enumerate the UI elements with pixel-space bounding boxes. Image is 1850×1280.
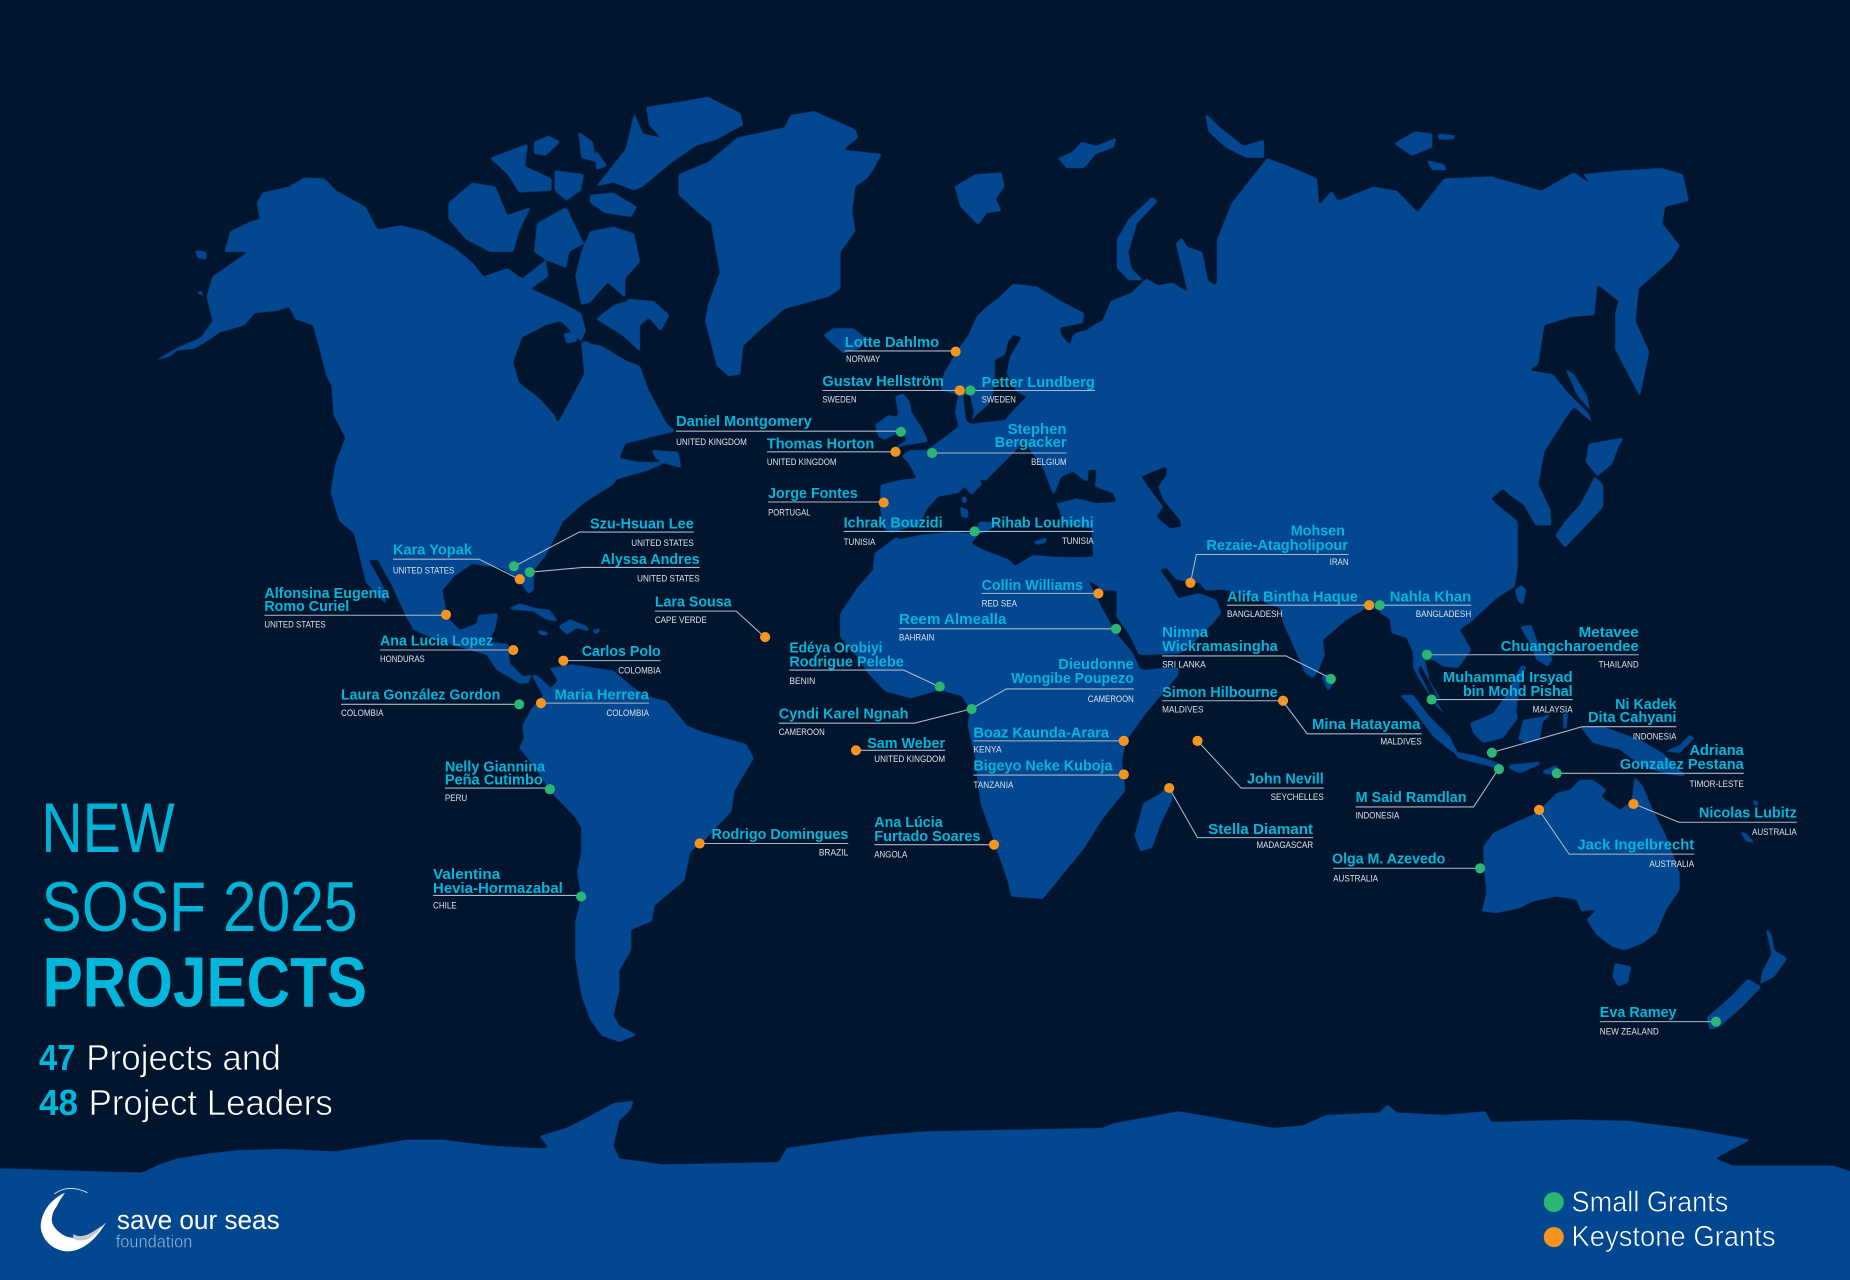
callout: Laura González Gordon: COLOMBIA <box>341 708 384 718</box>
callout: Jack Ingelbrecht: Jack Ingelbrecht <box>1577 837 1694 853</box>
legend: Small Grants <box>1571 1186 1728 1218</box>
callout: Jorge Fontes: PORTUGAL <box>768 508 811 518</box>
project and leader counts: 47 <box>39 1037 76 1078</box>
callout: Ichrak Bouzidi: Ichrak Bouzidi <box>844 515 943 531</box>
map: main land masses <box>152 158 1689 1042</box>
title: SOSF 2025 <box>41 867 358 946</box>
callout: Sam Weber <box>851 736 945 764</box>
callout: Laura González Gordon <box>341 688 524 718</box>
callout: Szu-Hsuan Lee: UNITED STATES <box>631 538 694 548</box>
callout: Valentina Hevia-Hormazabal: CHILE <box>433 900 457 910</box>
callout: Edéya Orobiyi Rodrigue Pelebe: BENIN <box>789 676 815 686</box>
callout: Nicolas Lubitz <box>1628 799 1797 837</box>
callout: Nimna Wickramasingha: Nimna <box>1162 625 1209 641</box>
callout: Bigeyo Neke Kuboja: Bigeyo Neke Kuboja <box>973 758 1113 774</box>
callout: Dieudonne Wongibe Poupezo <box>967 657 1134 714</box>
project and leader counts: 48 <box>39 1082 78 1123</box>
callout: Adriana Gonzalez Pestana: Adriana <box>1689 743 1745 759</box>
callout: Thomas Horton: Thomas Horton <box>767 436 874 452</box>
callout: Edéya Orobiyi Rodrigue Pelebe: Edéya Orobiyi <box>789 640 883 656</box>
callout: Thomas Horton <box>767 436 901 467</box>
callout: Petter Lundberg: Petter Lundberg <box>982 375 1095 391</box>
callout: Jorge Fontes <box>768 486 889 518</box>
logo: save our seas foundation <box>41 1188 280 1252</box>
callout: Ni Kadek Dita Cahyani <box>1487 697 1677 758</box>
callout: Thomas Horton: UNITED KINGDOM <box>767 457 837 467</box>
callout: Alfonsina Eugenia Romo Curiel: Romo Curiel <box>264 599 349 615</box>
callout: Alifa Bintha Haque <box>1227 590 1374 619</box>
callout: Ni Kadek Dita Cahyani: Dita Cahyani <box>1588 710 1676 726</box>
callout: Lotte Dahlmo <box>845 335 961 364</box>
callout: John Nevill: John Nevill <box>1247 771 1324 787</box>
callout: Cyndi Karel Ngnah: Cyndi Karel Ngnah <box>779 706 909 722</box>
callout: Rihab Louhichi: Rihab Louhichi <box>991 515 1094 531</box>
callout: Nelly Giannina Peña Cutimbo: Nelly Giannina <box>445 760 546 776</box>
callout: M Said Ramdlan: M Said Ramdlan <box>1356 790 1467 806</box>
callout: Adriana Gonzalez Pestana: Gonzalez Pestana <box>1620 757 1745 773</box>
callout: Ana Lúcia Furtado Soares <box>874 815 999 860</box>
callout: M Said Ramdlan: INDONESIA <box>1356 811 1399 821</box>
callout: Simon Hilbourne <box>1162 685 1288 715</box>
callout: Carlos Polo <box>558 644 661 676</box>
callout: Nimna Wickramasingha <box>1162 625 1336 684</box>
callout: Szu-Hsuan Lee: Szu-Hsuan Lee <box>590 517 694 533</box>
callout: Eva Ramey: Eva Ramey <box>1600 1005 1677 1021</box>
callout: Alfonsina Eugenia Romo Curiel <box>264 586 451 630</box>
callout: Stella Diamant: MADAGASCAR <box>1257 840 1314 850</box>
callout: Stephen Bergacker <box>927 422 1067 467</box>
callout: Kara Yopak: UNITED STATES <box>393 565 454 575</box>
callout: Ana Lúcia Furtado Soares: Furtado Soares <box>874 829 980 845</box>
callout: Olga M. Azevedo: Olga M. Azevedo <box>1332 852 1445 868</box>
callout: Metavee Chuangcharoendee: Chuangcharoendee <box>1501 639 1639 655</box>
callout: Ni Kadek Dita Cahyani: Ni Kadek <box>1615 697 1677 713</box>
callout: Nahla Khan: BANGLADESH <box>1416 609 1471 619</box>
callout: Valentina Hevia-Hormazabal <box>433 867 586 910</box>
callout: John Nevill: SEYCHELLES <box>1271 792 1324 802</box>
callout: Ana Lúcia Furtado Soares: ANGOLA <box>874 850 907 860</box>
callout: Simon Hilbourne: MALDIVES <box>1162 705 1203 715</box>
callout: Lara Sousa <box>655 594 770 642</box>
callout: Stephen Bergacker: BELGIUM <box>1031 457 1067 467</box>
callout: Reem Almealla: BAHRAIN <box>899 633 934 643</box>
callout: Adriana Gonzalez Pestana: TIMOR-LESTE <box>1689 779 1744 789</box>
callout: Lotte Dahlmo: NORWAY <box>846 354 880 364</box>
callout: Nahla Khan: Nahla Khan <box>1390 590 1471 606</box>
callout: Ichrak Bouzidi: TUNISIA <box>844 537 875 547</box>
callout: Alifa Bintha Haque: BANGLADESH <box>1227 609 1282 619</box>
callout: Lara Sousa: CAPE VERDE <box>655 615 707 625</box>
callout: Daniel Montgomery: Daniel Montgomery <box>676 414 813 430</box>
callout: Jorge Fontes: Jorge Fontes <box>768 486 858 502</box>
callout: Boaz Kaunda-Arara: Boaz Kaunda-Arara <box>973 725 1110 741</box>
callout: Maria Herrera: COLOMBIA <box>606 708 649 718</box>
callout: Nelly Giannina Peña Cutimbo: Peña Cutimbo <box>445 773 543 789</box>
callout: Collin Williams: Collin Williams <box>982 578 1083 594</box>
callout: Metavee Chuangcharoendee <box>1422 625 1639 670</box>
callout: Adriana Gonzalez Pestana <box>1552 743 1745 789</box>
callout: Muhammad Irsyad bin Mohd Pishal: bin Mohd Pishal <box>1463 684 1573 700</box>
callout: Alyssa Andres: UNITED STATES <box>637 574 700 584</box>
callout: Collin Williams: RED SEA <box>982 598 1017 608</box>
callout: Nahla Khan <box>1375 590 1471 619</box>
callout: Ni Kadek Dita Cahyani: INDONESIA <box>1633 732 1676 742</box>
callout: John Nevill <box>1192 736 1324 802</box>
callout: Boaz Kaunda-Arara: KENYA <box>973 745 1002 755</box>
callout: Petter Lundberg <box>965 375 1095 404</box>
callout: Maria Herrera: Maria Herrera <box>555 688 650 704</box>
logo: save our seas foundation: foundation <box>116 1232 192 1252</box>
callout: Muhammad Irsyad bin Mohd Pishal: MALAYSIA <box>1533 705 1573 715</box>
callout: Daniel Montgomery <box>676 414 906 447</box>
callout: Rodrigo Domingues: BRAZIL <box>819 847 848 857</box>
callout: Kara Yopak <box>393 542 525 584</box>
callout: Ana Lucia Lopez: HONDURAS <box>380 654 425 664</box>
logo: save our seas foundation: save our seas <box>117 1204 280 1235</box>
callout: Nelly Giannina Peña Cutimbo <box>445 760 555 803</box>
callout: Maria Herrera <box>536 688 650 718</box>
callout: Mina Hatayama: Mina Hatayama <box>1312 717 1421 733</box>
callout: Sam Weber: Sam Weber <box>867 736 945 752</box>
callout: Stephen Bergacker: Stephen <box>1008 422 1067 438</box>
callout: Metavee Chuangcharoendee: THAILAND <box>1599 660 1639 670</box>
callout: Alfonsina Eugenia Romo Curiel: UNITED STATES <box>264 620 326 630</box>
callout: Kara Yopak: Kara Yopak <box>393 542 473 558</box>
map: Antarctica band <box>0 1101 1850 1280</box>
callout: Dieudonne Wongibe Poupezo: Dieudonne <box>1058 657 1134 673</box>
callout: Olga M. Azevedo <box>1332 852 1485 883</box>
callout: Jack Ingelbrecht <box>1534 805 1694 869</box>
callout: Cyndi Karel Ngnah <box>779 706 971 737</box>
callout: Reem Almealla: Reem Almealla <box>899 612 1007 628</box>
map: inland seas and bays <box>513 282 1227 670</box>
callout: Sam Weber: UNITED KINGDOM <box>874 754 945 764</box>
title: NEW <box>41 788 175 867</box>
callout: Mohsen Rezaie-Atagholipour: Rezaie-Atagholipour <box>1206 538 1348 554</box>
title: PROJECTS <box>43 942 367 1021</box>
callout: Edéya Orobiyi Rodrigue Pelebe <box>789 640 945 692</box>
legend <box>1544 1186 1776 1252</box>
callout: Cyndi Karel Ngnah: CAMEROON <box>779 727 825 737</box>
callout: Muhammad Irsyad bin Mohd Pishal <box>1427 670 1573 715</box>
callout: Rihab Louhichi: TUNISIA <box>1062 536 1094 546</box>
callout: Mohsen Rezaie-Atagholipour <box>1185 524 1349 588</box>
callout: Alyssa Andres <box>525 552 700 584</box>
callout: Eva Ramey <box>1600 1005 1721 1037</box>
callout: Nimna Wickramasingha: SRI LANKA <box>1162 660 1206 670</box>
callout: Alyssa Andres: Alyssa Andres <box>601 552 700 568</box>
callout: Olga M. Azevedo: AUSTRALIA <box>1333 873 1378 883</box>
callout: Gustav Hellström: Gustav Hellström <box>822 374 944 390</box>
callout: Edéya Orobiyi Rodrigue Pelebe: Rodrigue Pelebe <box>789 655 904 671</box>
callout: Ichrak Bouzidi <box>844 515 975 547</box>
callout: Eva Ramey: NEW ZEALAND <box>1600 1027 1659 1037</box>
callout: Stephen Bergacker: Bergacker <box>995 435 1067 451</box>
callout: Bigeyo Neke Kuboja <box>973 758 1129 790</box>
callout: Nicolas Lubitz: AUSTRALIA <box>1752 827 1797 837</box>
callout: Ana Lúcia Furtado Soares: Ana Lúcia <box>874 815 944 831</box>
callout: Collin Williams <box>982 578 1103 608</box>
callout: Mina Hatayama: MALDIVES <box>1380 736 1422 746</box>
callout: Mohsen Rezaie-Atagholipour: Mohsen <box>1291 524 1345 540</box>
callout: Metavee Chuangcharoendee: Metavee <box>1579 625 1639 641</box>
callout: Lotte Dahlmo: Lotte Dahlmo <box>845 335 939 351</box>
callout: Daniel Montgomery: UNITED KINGDOM <box>676 437 747 447</box>
callout: Valentina Hevia-Hormazabal: Hevia-Hormazabal <box>433 881 563 897</box>
callout: Nicolas Lubitz: Nicolas Lubitz <box>1699 806 1797 822</box>
callout: Simon Hilbourne: Simon Hilbourne <box>1162 685 1278 701</box>
callout: Reem Almealla <box>899 612 1121 643</box>
callout: Gustav Hellström <box>822 374 965 404</box>
callout: Ana Lucia Lopez <box>380 633 518 664</box>
callout: Stella Diamant: Stella Diamant <box>1208 822 1313 838</box>
callout: Ana Lucia Lopez: Ana Lucia Lopez <box>380 633 493 649</box>
callout: Valentina Hevia-Hormazabal: Valentina <box>433 867 501 883</box>
project and leader counts: Projects and <box>86 1037 281 1078</box>
callout: Boaz Kaunda-Arara <box>973 725 1129 755</box>
callout: Bigeyo Neke Kuboja: TANZANIA <box>973 780 1014 790</box>
callout: Rihab Louhichi <box>969 515 1094 546</box>
callout: Mina Hatayama <box>1282 701 1422 746</box>
callout: Nimna Wickramasingha: Wickramasingha <box>1162 639 1279 655</box>
callout: M Said Ramdlan <box>1356 764 1504 821</box>
legend: Keystone Grants <box>1571 1220 1776 1252</box>
project and leader counts: Project Leaders <box>89 1082 333 1123</box>
callout: Szu-Hsuan Lee <box>509 517 694 571</box>
callout: Petter Lundberg: SWEDEN <box>982 394 1016 404</box>
callout: Dieudonne Wongibe Poupezo: CAMEROON <box>1088 694 1134 704</box>
callout: Alifa Bintha Haque: Alifa Bintha Haque <box>1227 590 1358 606</box>
callout: Alfonsina Eugenia Romo Curiel: Alfonsina Eugenia <box>264 586 390 602</box>
callout: Mohsen Rezaie-Atagholipour: IRAN <box>1330 557 1349 567</box>
callout: Carlos Polo: COLOMBIA <box>618 666 661 676</box>
callout: Laura González Gordon: Laura González Gordon <box>341 688 500 704</box>
project and leader counts <box>39 1037 333 1123</box>
title <box>41 788 367 1021</box>
callout: Nelly Giannina Peña Cutimbo: PERU <box>445 793 467 803</box>
callout: Stella Diamant <box>1164 783 1314 850</box>
callout: Jack Ingelbrecht: AUSTRALIA <box>1649 859 1694 869</box>
callout: Rodrigo Domingues: Rodrigo Domingues <box>711 827 848 843</box>
map: islands <box>195 97 1787 1030</box>
callout: Lara Sousa: Lara Sousa <box>655 594 732 610</box>
callout: Carlos Polo: Carlos Polo <box>582 644 661 660</box>
callout: Gustav Hellström: SWEDEN <box>822 394 857 404</box>
callout: Dieudonne Wongibe Poupezo: Wongibe Poupezo <box>1011 671 1134 687</box>
callout: Muhammad Irsyad bin Mohd Pishal: Muhammad Irsyad <box>1443 670 1573 686</box>
callout: Rodrigo Domingues <box>695 827 848 857</box>
